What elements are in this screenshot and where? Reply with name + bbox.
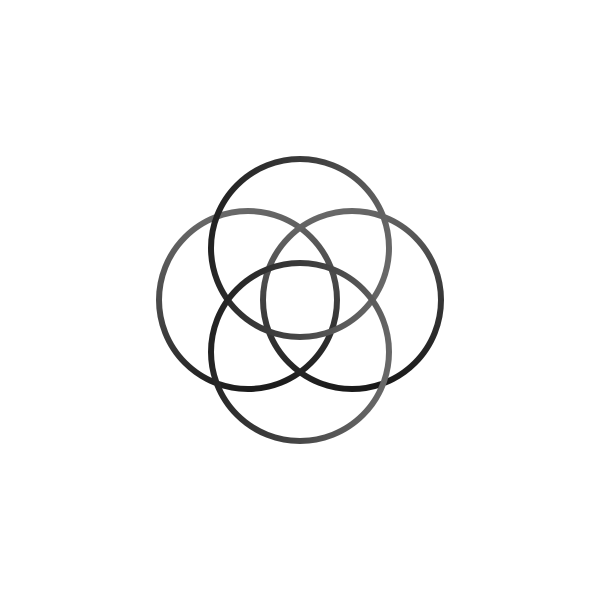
top circle [211,159,389,337]
bottom circle [211,263,389,441]
left circle [159,211,337,389]
right circle [263,211,441,389]
